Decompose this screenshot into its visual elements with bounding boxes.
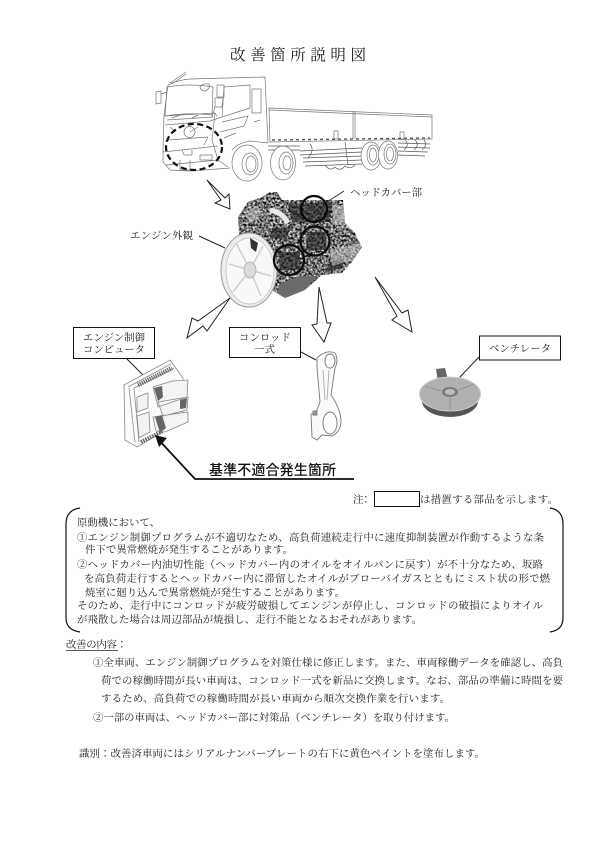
- side windows: [222, 85, 261, 117]
- windshield: [165, 85, 213, 116]
- engine body texture: [238, 192, 362, 298]
- ventilator illustration: [420, 368, 480, 417]
- panel: cause description: [66, 508, 563, 632]
- label box: ventilator: [459, 336, 560, 378]
- cab side: [212, 113, 260, 167]
- arrow: engine to ECU: [187, 298, 230, 338]
- cause text: ①エンジン制御プログラムが不適切なため、高負荷連続走行中に速度抑制装置が作動するような条: [77, 531, 545, 544]
- cause text: が飛散した場合は周辺部品が焼損し、走行不能となるおそれがあります。: [77, 613, 422, 626]
- heading: improvement details: 改善の内容：: [66, 638, 127, 651]
- label box: connecting rod: [230, 328, 316, 360]
- note: は措置する部品を示します。: [420, 493, 558, 506]
- bed latches: [334, 131, 404, 139]
- oil pan: [275, 276, 318, 299]
- title: 改善箇所説明図: [230, 46, 366, 64]
- improvement text: ①全車両、エンジン制御プログラムを対策仕様に修正します。また、車両稼働データを確認し、高負: [93, 656, 564, 669]
- cause text: 焼室に廻り込んで異常燃焼が発生することがあります。: [85, 586, 345, 599]
- wheels: [232, 141, 398, 181]
- cause text: そのため、走行中にコンロッドが疲労破損してエンジンが停止し、コンロッドの破損によりオイル: [77, 599, 544, 612]
- improvement text: するため、高負荷での稼働時間が長い車両から順次交換作業を行います。: [101, 692, 450, 705]
- cause text: ②ヘッドカバー内油切性能（ヘッドカバー内のオイルをオイルパンに戻す）が不十分なため、坂路: [77, 558, 544, 571]
- label box: ventilator: ベンチレータ: [489, 343, 551, 355]
- bracket: left: [66, 508, 80, 632]
- cause text: 原動機において、: [77, 516, 160, 529]
- dashed circle: engine location: [166, 124, 222, 170]
- arrow: non-compliance location: 基準不適合発生箇所: [209, 462, 336, 478]
- engine illustration: [221, 188, 370, 307]
- label box: engine control computer: エンジン制御: [83, 331, 145, 344]
- cab outline: [163, 77, 268, 171]
- identification note: 識別：改善済車両にはシリアルナンバープレートの右下に黄色ペイントを塗布します。: [79, 747, 485, 760]
- label box: engine control computer: [74, 328, 154, 375]
- note: 注：: [353, 494, 371, 506]
- engine light parts: [245, 205, 360, 266]
- arrow: engine to ventilator: [375, 277, 412, 332]
- label box: engine control computer: コンピュータ: [83, 344, 145, 356]
- engine dark parts: [270, 202, 345, 272]
- truck bed: [268, 108, 432, 142]
- antenna: [170, 72, 186, 84]
- label: engine exterior: [130, 229, 225, 248]
- truck illustration: [156, 72, 432, 181]
- bed bottom strip: [272, 138, 430, 140]
- improvement text: [93, 656, 564, 724]
- circle markers: [274, 196, 330, 275]
- label: head cover: ヘッドカバー部: [350, 186, 423, 199]
- connecting rod illustration: [311, 352, 341, 440]
- ECU pockets: [137, 393, 150, 438]
- ECU ribs: [138, 368, 172, 385]
- label box: connecting rod: 一式: [254, 343, 275, 356]
- cause text: [77, 516, 551, 626]
- improvement text: ②一部の車両は、ヘッドカバー部に対策品（ベンチレータ）を取り付けます。: [93, 711, 455, 724]
- label: head cover: [327, 186, 423, 202]
- bracket: right: [550, 508, 563, 632]
- intake pipe: [270, 210, 288, 223]
- improvement text: 荷での稼働時間が長い車両は、コンロッド一式を新品に交換します。なお、部品の準備に時間を要: [101, 674, 564, 687]
- grille and bumper: [163, 113, 222, 170]
- note: [353, 492, 558, 506]
- arrow: truck to engine: [207, 180, 230, 209]
- chassis: [268, 140, 430, 169]
- label box: connecting rod: コンロッド: [239, 333, 291, 344]
- arrow: non-compliance location: [155, 435, 354, 479]
- ECU illustration: [124, 360, 188, 447]
- flywheel: [221, 233, 277, 307]
- cause text: 件下で異常燃焼が発生することがあります。: [85, 543, 293, 556]
- label: engine exterior: エンジン外観: [130, 229, 194, 242]
- ECU connectors: [153, 380, 188, 432]
- arrow: engine to connecting rod: [312, 287, 331, 342]
- cause text: を高負荷走行するとヘッドカバー内に滞留したオイルがブローバイガスとともにミスト状の形で燃: [84, 572, 551, 585]
- mirrors: [156, 84, 224, 117]
